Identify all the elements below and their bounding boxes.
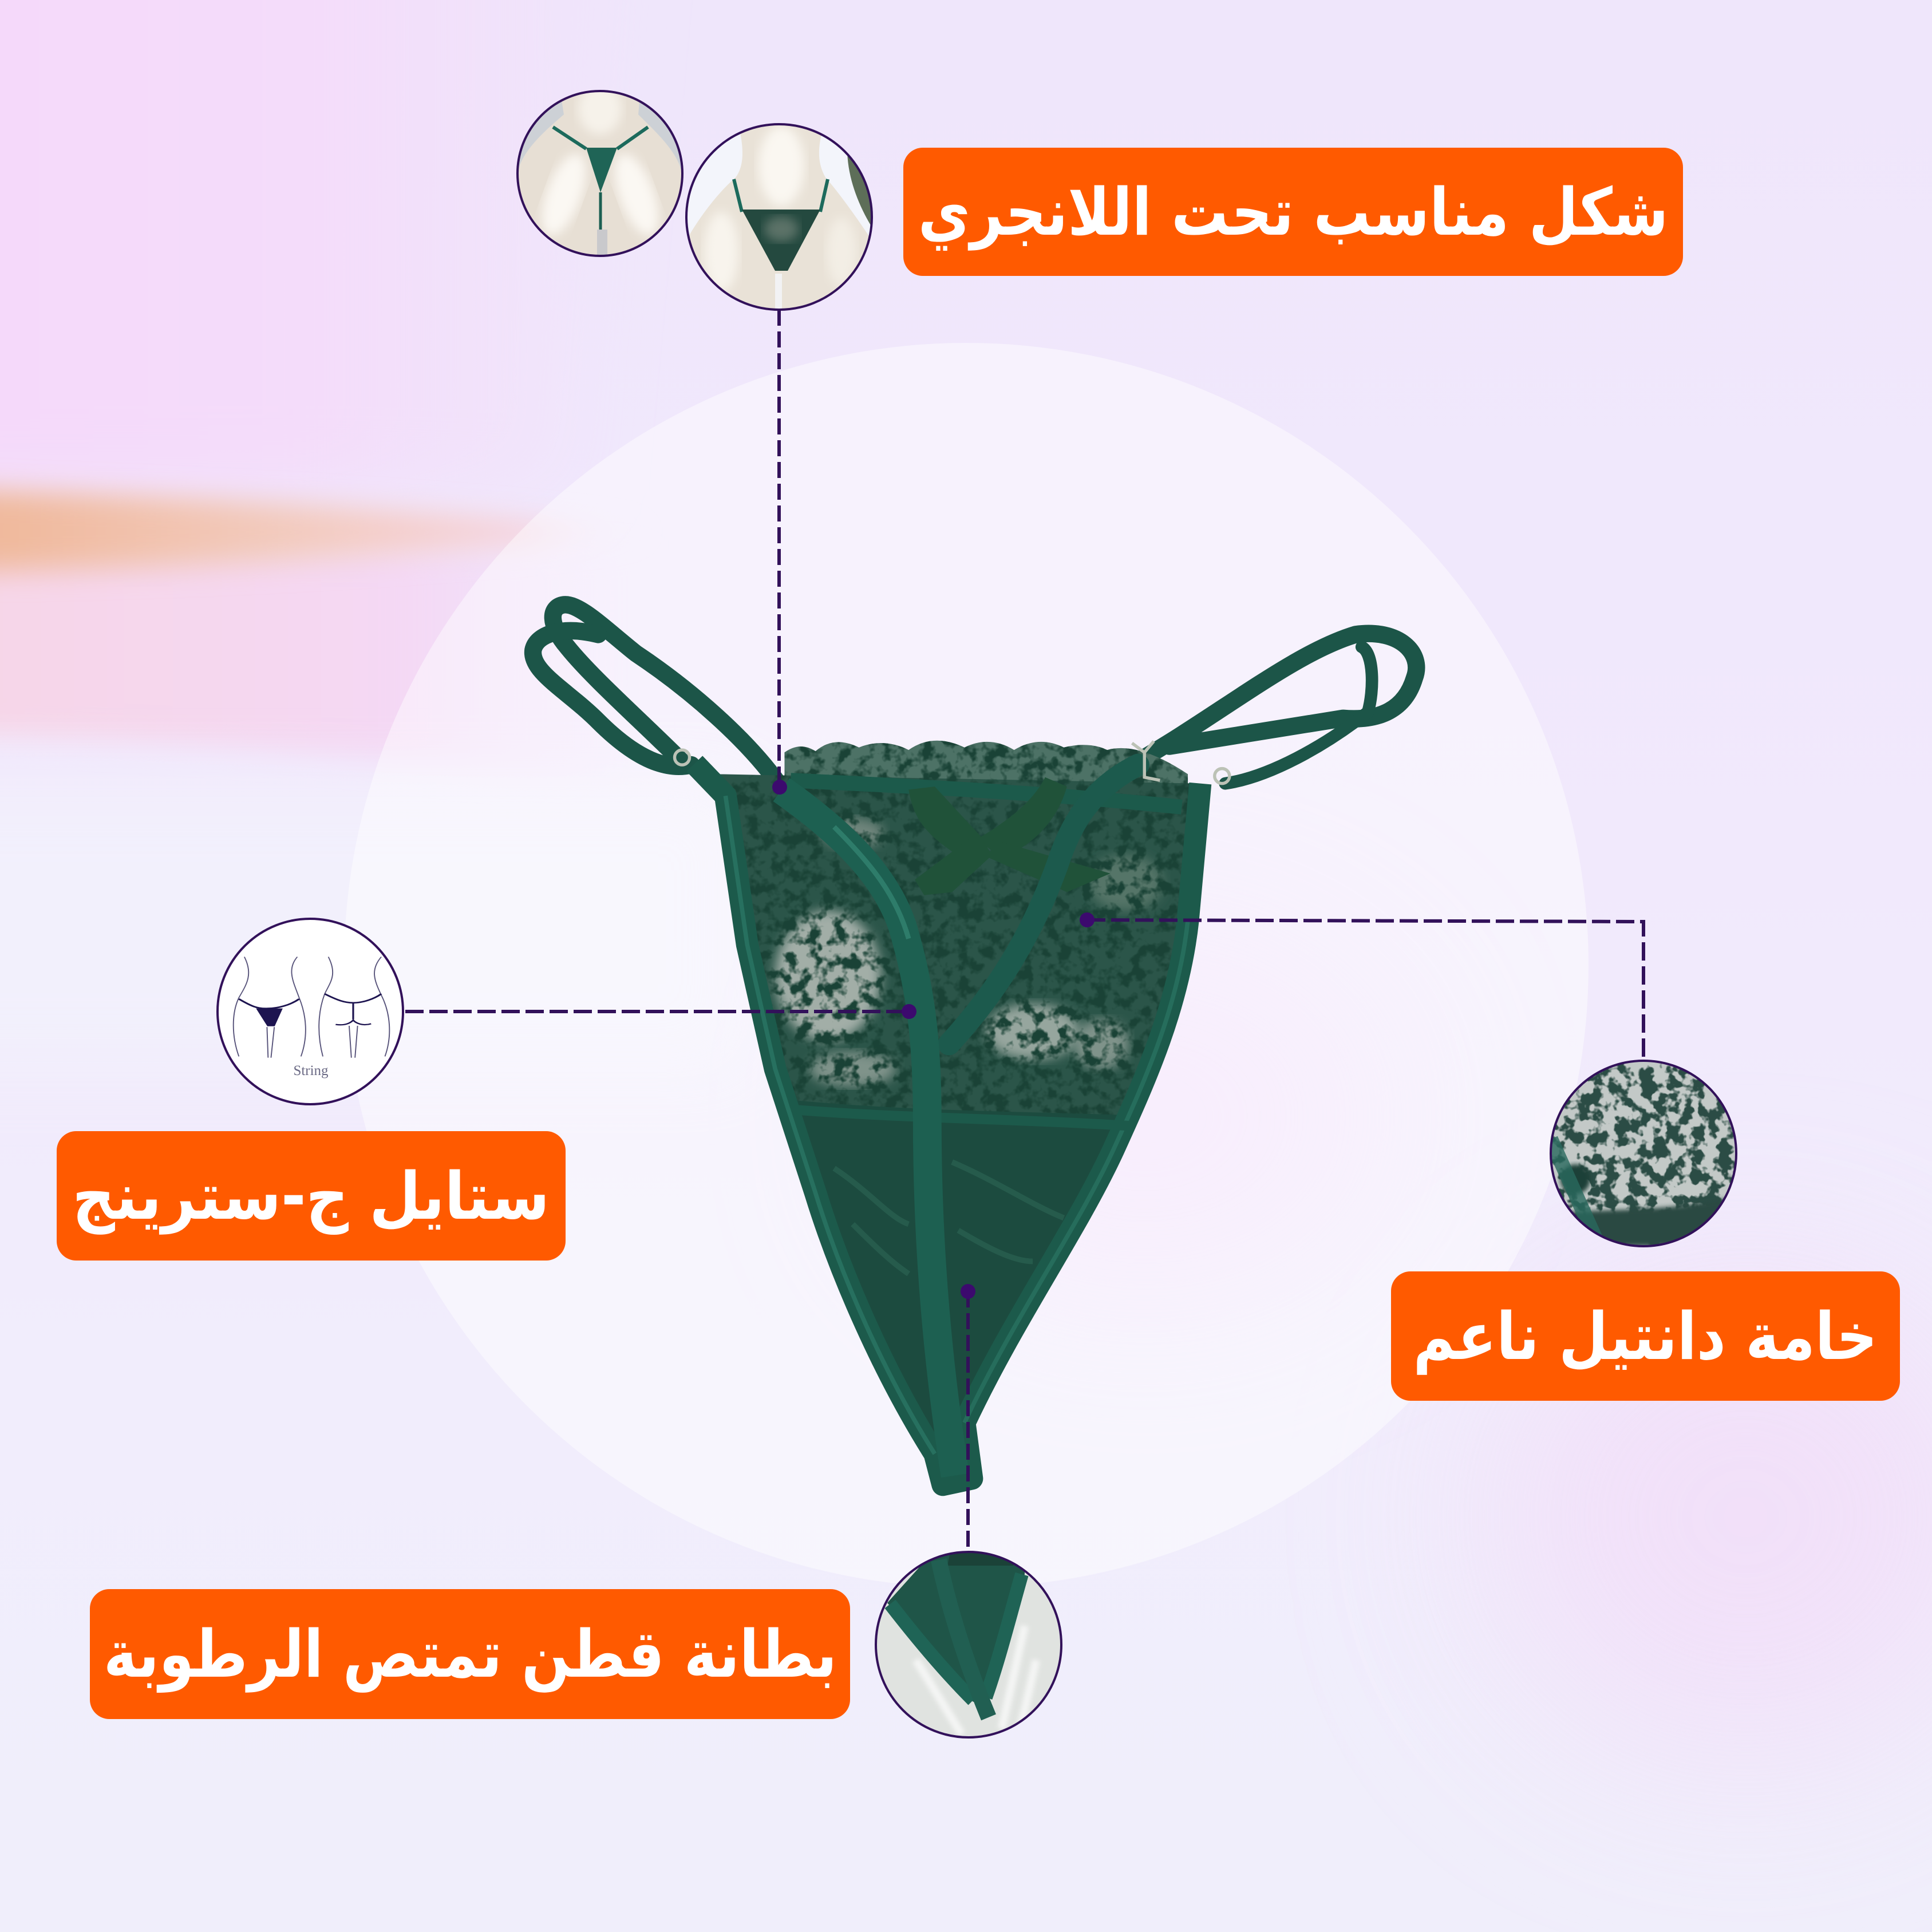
thumbnail: back view on form xyxy=(519,92,681,255)
icon: string style diagram xyxy=(218,919,403,1104)
label: soft lace material xyxy=(1391,1271,1900,1401)
lining panel xyxy=(791,1100,1138,1441)
label: g-string style: ستايل ج-سترينج xyxy=(73,1157,550,1234)
product: green lace garment xyxy=(533,605,1416,1485)
ring hardware xyxy=(675,741,1230,784)
lace panel xyxy=(716,771,1213,1137)
icon: string style diagram: String xyxy=(293,1063,329,1078)
leader line: top xyxy=(772,310,787,795)
label: shape under lingerie xyxy=(903,148,1683,276)
centre strap xyxy=(781,789,955,1476)
label: soft lace material: خامة دانتيل ناعم xyxy=(1413,1298,1878,1374)
thumbnail ring 5 xyxy=(876,1552,1061,1737)
label: shape under lingerie: شكل مناسب تحت اللانجري xyxy=(918,174,1668,250)
crossing strap xyxy=(949,765,1138,1044)
edge binding xyxy=(694,764,1200,1485)
leader line: bottom xyxy=(961,1284,975,1552)
bow xyxy=(908,777,1111,895)
thumbnail: front view on form xyxy=(686,124,873,311)
thumbnail: lace close-up xyxy=(1551,1061,1736,1246)
scalloped lace top xyxy=(779,730,1194,799)
leader line: right xyxy=(1080,912,1643,1061)
label: moisture absorbing cotton lining xyxy=(90,1589,850,1719)
label: g-string style xyxy=(57,1131,566,1261)
thumbnail ring 4 xyxy=(1551,1061,1736,1246)
thumbnail ring 1 xyxy=(517,91,682,256)
leader line: left xyxy=(405,1004,916,1019)
thumbnail ring 2 xyxy=(686,124,872,310)
label: moisture absorbing cotton lining: بطانة قطن تمتص الرطوبة xyxy=(104,1616,836,1692)
thumbnail: lining close-up xyxy=(876,1546,1061,1737)
central pale circle xyxy=(344,343,1589,1587)
